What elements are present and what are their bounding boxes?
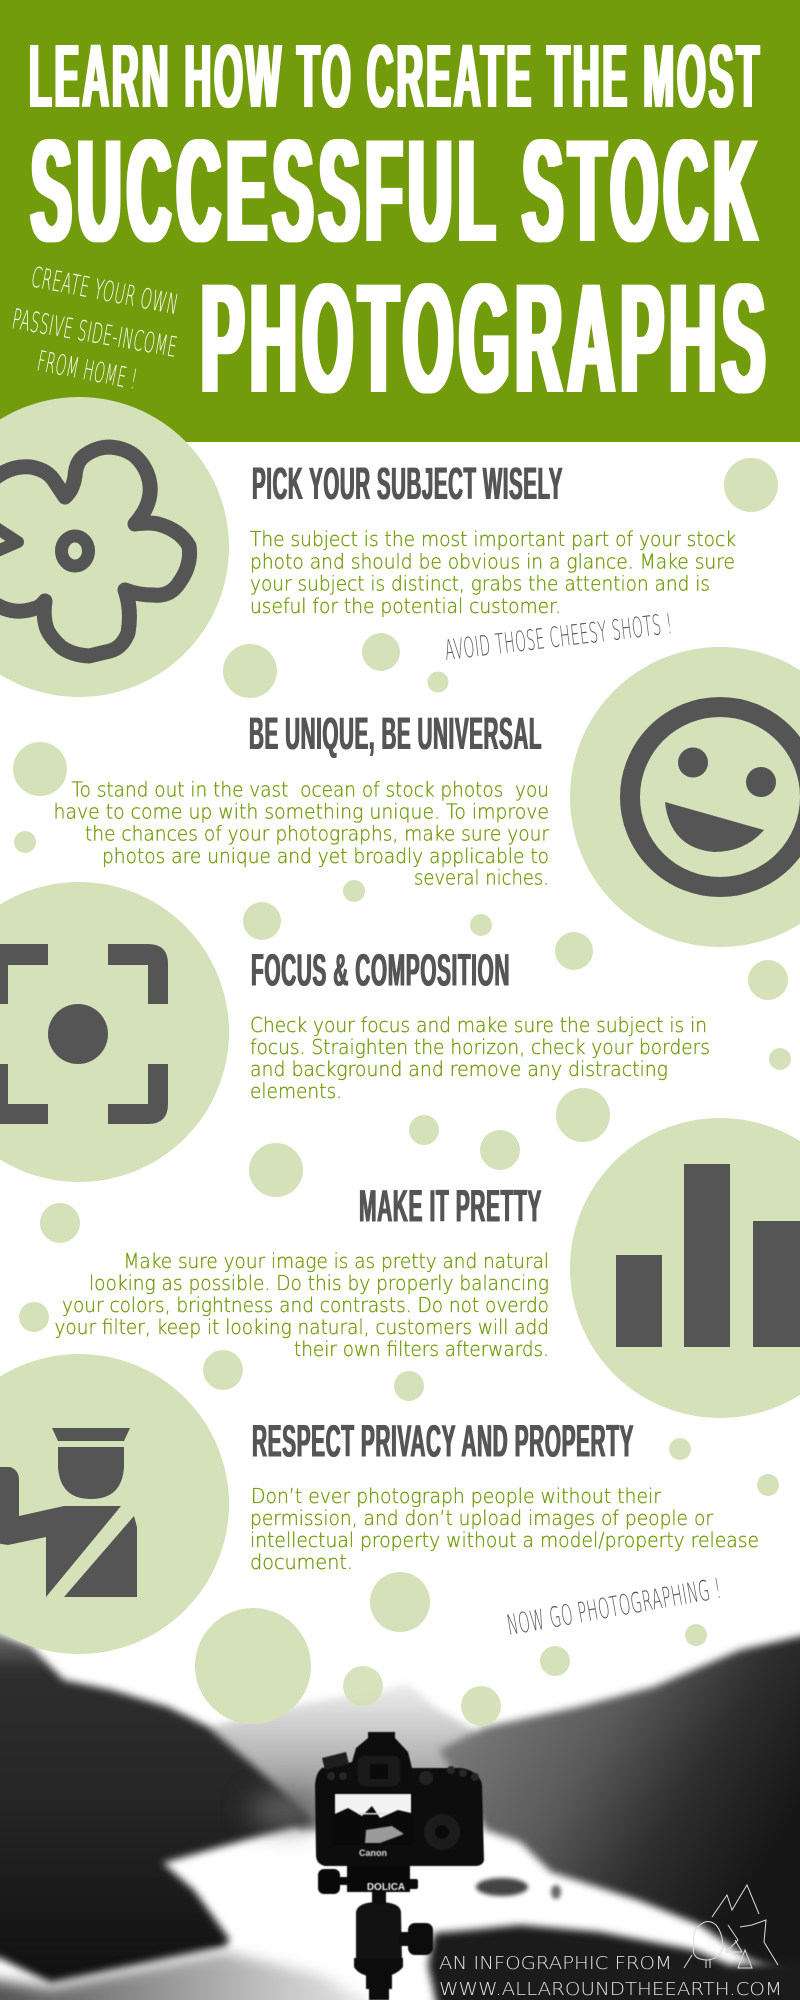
icon: flower (0, 447, 190, 656)
icon: police officer (0, 1428, 137, 1597)
foreground trees (428, 1925, 800, 2000)
mode dial (322, 1752, 349, 1770)
text 1 (250, 527, 736, 618)
circle 3 (0, 882, 229, 1182)
text 4: looking as possible. Do this by properly balancing (89, 1271, 549, 1295)
camera screen (333, 1792, 413, 1845)
text 3: focus. Straighten the horizon, check your borders (250, 1035, 710, 1059)
text 5: document. (250, 1550, 353, 1574)
camera on tripod (315, 1732, 484, 2000)
text 4: your colors, brightness and contrasts. Do not overdo (62, 1293, 549, 1317)
quick release plate (318, 1865, 418, 1894)
panel: pick your subject (0, 397, 736, 697)
header band (0, 0, 800, 442)
panel: focus and composition: FOCUS & COMPOSITION (251, 944, 510, 996)
panel: respect privacy (0, 1354, 759, 1654)
text 2: To stand out in the vast ocean of stock photos you (72, 778, 549, 802)
handwritten note: passive income: CREATE YOUR OWN (29, 260, 181, 321)
islands (476, 1878, 528, 1896)
text 1: The subject is the most important part of your stock (250, 527, 736, 551)
text 4: their own filters afterwards. (294, 1337, 549, 1361)
panel: make it pretty: MAKE IT PRETTY (359, 1180, 542, 1232)
icon: site logo (684, 1885, 778, 1968)
icon: bar chart (616, 1164, 800, 1347)
plate brand text: DOLICA (367, 1882, 405, 1893)
text 1: your subject is distinct, grabs the attention and is (250, 572, 710, 596)
photo: mountain lake background (0, 1628, 800, 2000)
text 1: useful for the potential customer. (250, 594, 561, 618)
handwritten note: passive income: FROM HOME ! (35, 344, 140, 396)
viewfinder (358, 1756, 400, 1786)
lake shadow at lower left (0, 1952, 400, 2000)
circle 5 (0, 1354, 229, 1654)
text 3: Check your focus and make sure the subject is in (250, 1013, 707, 1037)
text 5: intellectual property without a model/property release (250, 1528, 759, 1552)
text 2: photos are unique and yet broadly applicable to (102, 844, 549, 868)
text 1: photo and should be obvious in a glance. Make sure (250, 550, 735, 574)
circle 1 (0, 397, 229, 697)
circle 4 (570, 1118, 800, 1418)
text 2: several niches. (414, 866, 549, 890)
text 2 (54, 778, 550, 890)
text 5: Don’t ever photograph people without their (251, 1484, 662, 1508)
icon: focus frame (0, 944, 168, 1124)
text 5: permission, and don’t upload images of people or (250, 1506, 714, 1530)
haze at left mountain foot (250, 1794, 320, 1826)
panel: be unique (54, 647, 800, 947)
handwritten note: passive income: PASSIVE SIDE-INCOME (10, 302, 180, 364)
text 5 (250, 1484, 759, 1574)
left mountain (0, 1628, 312, 1983)
text 3: elements. (250, 1079, 342, 1103)
title (29, 27, 771, 426)
footer credit: WWW.ALLAROUNDTHEEARTH.COM (439, 1979, 782, 2000)
control dial (424, 1814, 460, 1850)
text 2: have to come up with something unique. To improve (54, 800, 549, 824)
text 3 (250, 1013, 710, 1103)
bubbles (13, 458, 791, 1726)
footer credit: AN INFOGRAPHIC FROM (439, 1953, 672, 1974)
panel: make it pretty (54, 1118, 800, 1418)
far mountain (209, 1683, 500, 1830)
text 2: the chances of your photographs, make sure your (85, 822, 550, 846)
icon: smiley (630, 707, 800, 887)
right mountain (439, 1632, 800, 1985)
text 4 (54, 1249, 549, 1361)
circle 2 (570, 647, 800, 947)
text 4: Make sure your image is as pretty and natural (124, 1249, 549, 1273)
tripod head (354, 1892, 433, 2000)
camera brand text: Canon (359, 1848, 387, 1858)
handwritten note: passive income (10, 260, 181, 396)
camera body (315, 1732, 484, 1866)
text 4: your filter, keep it looking natural, customers will add (54, 1315, 549, 1339)
text 3: and background and remove any distracting (250, 1057, 668, 1081)
panel: focus and composition (0, 882, 710, 1182)
footer credit (439, 1953, 782, 2000)
